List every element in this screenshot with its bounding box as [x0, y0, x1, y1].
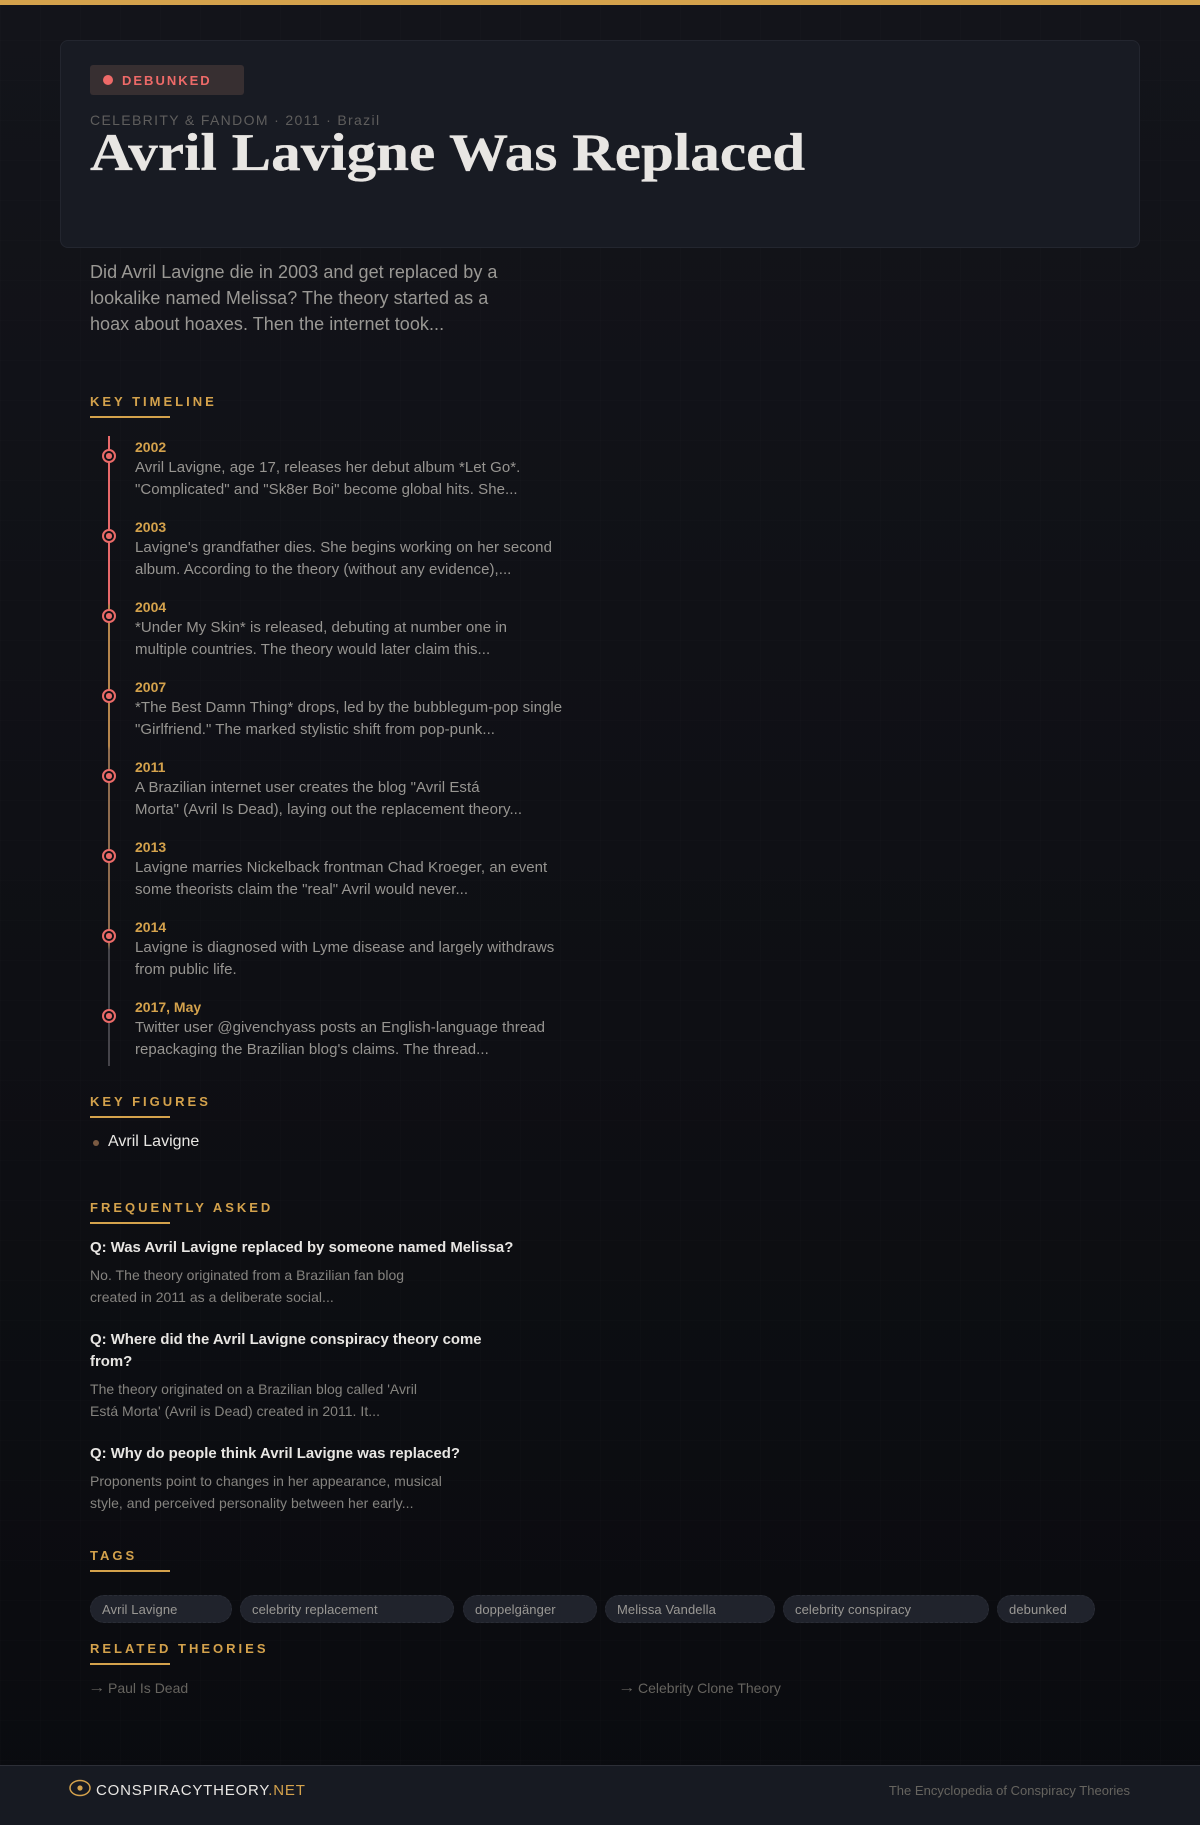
- event 2014: [102, 919, 554, 978]
- event 2007: "Girlfriend." The marked stylistic shift from pop-punk...: [135, 721, 495, 738]
- event 2004: multiple countries. The theory would later claim this...: [135, 641, 490, 658]
- event 2003: album. According to the theory (without any evidence),...: [135, 561, 511, 578]
- event 2002: [102, 439, 520, 498]
- faq 2: from?: [90, 1353, 132, 1370]
- event 2007: 2007: [135, 679, 166, 695]
- heading: related theories: RELATED THEORIES: [90, 1641, 268, 1656]
- event 2011: 2011: [135, 759, 165, 775]
- logo wordmark: CONSPIRACYTHEORY.NET: [96, 1782, 306, 1799]
- icon: eye logo: [69, 1780, 91, 1796]
- event 2017: 2017, May: [135, 999, 201, 1015]
- event 2013: [102, 839, 548, 898]
- timeline rail: [108, 436, 110, 1066]
- related link: Paul Is Dead: →: [88, 1679, 106, 1695]
- tags row: celebrity replacement: [252, 1602, 378, 1617]
- event 2014: from public life.: [135, 961, 237, 978]
- heading: tags: TAGS: [90, 1548, 137, 1563]
- faq 3: style, and perceived personality between her early...: [90, 1495, 414, 1511]
- faq 2: Está Morta' (Avril is Dead) created in 2011. It...: [90, 1403, 380, 1419]
- event 2003: [102, 519, 552, 578]
- badge: debunked: DEBUNKED: [122, 73, 212, 88]
- event 2013: some theorists claim the "real" Avril would never...: [135, 881, 468, 898]
- event 2002: "Complicated" and "Sk8er Boi" become global hits. She...: [135, 481, 518, 498]
- event 2011: Morta" (Avril Is Dead), laying out the replacement theory...: [135, 801, 522, 818]
- event 2013: Lavigne marries Nickelback frontman Chad Kroeger, an event: [135, 859, 547, 876]
- heading: key timeline: KEY TIMELINE: [90, 394, 217, 409]
- related link: Celebrity Clone Theory: →: [618, 1679, 636, 1695]
- faq 1: created in 2011 as a deliberate social...: [90, 1289, 334, 1305]
- timeline: [108, 436, 110, 1066]
- footer tagline: The Encyclopedia of Conspiracy Theories: [889, 1783, 1130, 1798]
- tags row: Avril Lavigne: [102, 1602, 178, 1617]
- tags row: [90, 1595, 1095, 1623]
- faq 2: The theory originated on a Brazilian blog called 'Avril: [90, 1381, 417, 1397]
- event 2004: *Under My Skin* is released, debuting at number one in: [135, 619, 507, 636]
- tags row: debunked: [1009, 1602, 1067, 1617]
- event 2011: [102, 759, 522, 818]
- intro text: Did Avril Lavigne die in 2003 and get replaced by a: [90, 262, 498, 282]
- event 2014: Lavigne is diagnosed with Lyme disease and largely withdraws: [135, 939, 554, 956]
- panel: header card: [60, 40, 1140, 248]
- event 2004: 2004: [135, 599, 166, 615]
- event 2002: Avril Lavigne, age 17, releases her debut album *Let Go*.: [135, 459, 520, 476]
- intro text: lookalike named Melissa? The theory started as a: [90, 288, 488, 308]
- event 2017: repackaging the Brazilian blog's claims. The thread...: [135, 1041, 489, 1058]
- faq 1: No. The theory originated from a Brazilian fan blog: [90, 1267, 404, 1283]
- tags row: Melissa Vandella: [617, 1602, 716, 1617]
- faq 3: Q: Why do people think Avril Lavigne was replaced?: [90, 1445, 460, 1462]
- heading: frequently asked: FREQUENTLY ASKED: [90, 1200, 273, 1215]
- event 2003: Lavigne's grandfather dies. She begins working on her second: [135, 539, 552, 556]
- faq 1: [90, 1239, 513, 1305]
- event 2011: A Brazilian internet user creates the blog "Avril Está: [135, 779, 480, 796]
- faq 3: [90, 1445, 460, 1511]
- footer: [0, 1765, 1200, 1825]
- faq 1: Q: Was Avril Lavigne replaced by someone named Melissa?: [90, 1239, 513, 1256]
- event 2002: 2002: [135, 439, 166, 455]
- faq 3: Proponents point to changes in her appearance, musical: [90, 1473, 442, 1489]
- heading: key figures: KEY FIGURES: [90, 1094, 211, 1109]
- title: Avril Lavigne Was Replaced: [90, 124, 805, 182]
- event 2017: [102, 999, 545, 1058]
- event 2014: 2014: [135, 919, 166, 935]
- faq 2: [90, 1331, 482, 1419]
- intro text: [90, 262, 498, 334]
- tags row: celebrity conspiracy: [795, 1602, 911, 1617]
- event 2017: Twitter user @givenchyass posts an English-language thread: [135, 1019, 545, 1036]
- badge: debunked: [90, 65, 244, 95]
- intro text: hoax about hoaxes. Then the internet took...: [90, 314, 444, 334]
- related link: Paul Is Dead: Paul Is Dead: [108, 1680, 188, 1696]
- event 2013: 2013: [135, 839, 166, 855]
- event 2007: *The Best Damn Thing* drops, led by the bubblegum-pop single: [135, 699, 562, 716]
- event 2003: 2003: [135, 519, 166, 535]
- event 2007: [102, 679, 562, 738]
- event 2004: [102, 599, 507, 658]
- tags row: doppelgänger: [475, 1602, 556, 1617]
- related link: Celebrity Clone Theory: Celebrity Clone Theory: [638, 1680, 781, 1696]
- faq 2: Q: Where did the Avril Lavigne conspiracy theory come: [90, 1331, 482, 1348]
- meta line: CELEBRITY & FANDOM · 2011 · Brazil: [90, 112, 380, 128]
- key figure: Avril Lavigne: Avril Lavigne: [108, 1133, 199, 1150]
